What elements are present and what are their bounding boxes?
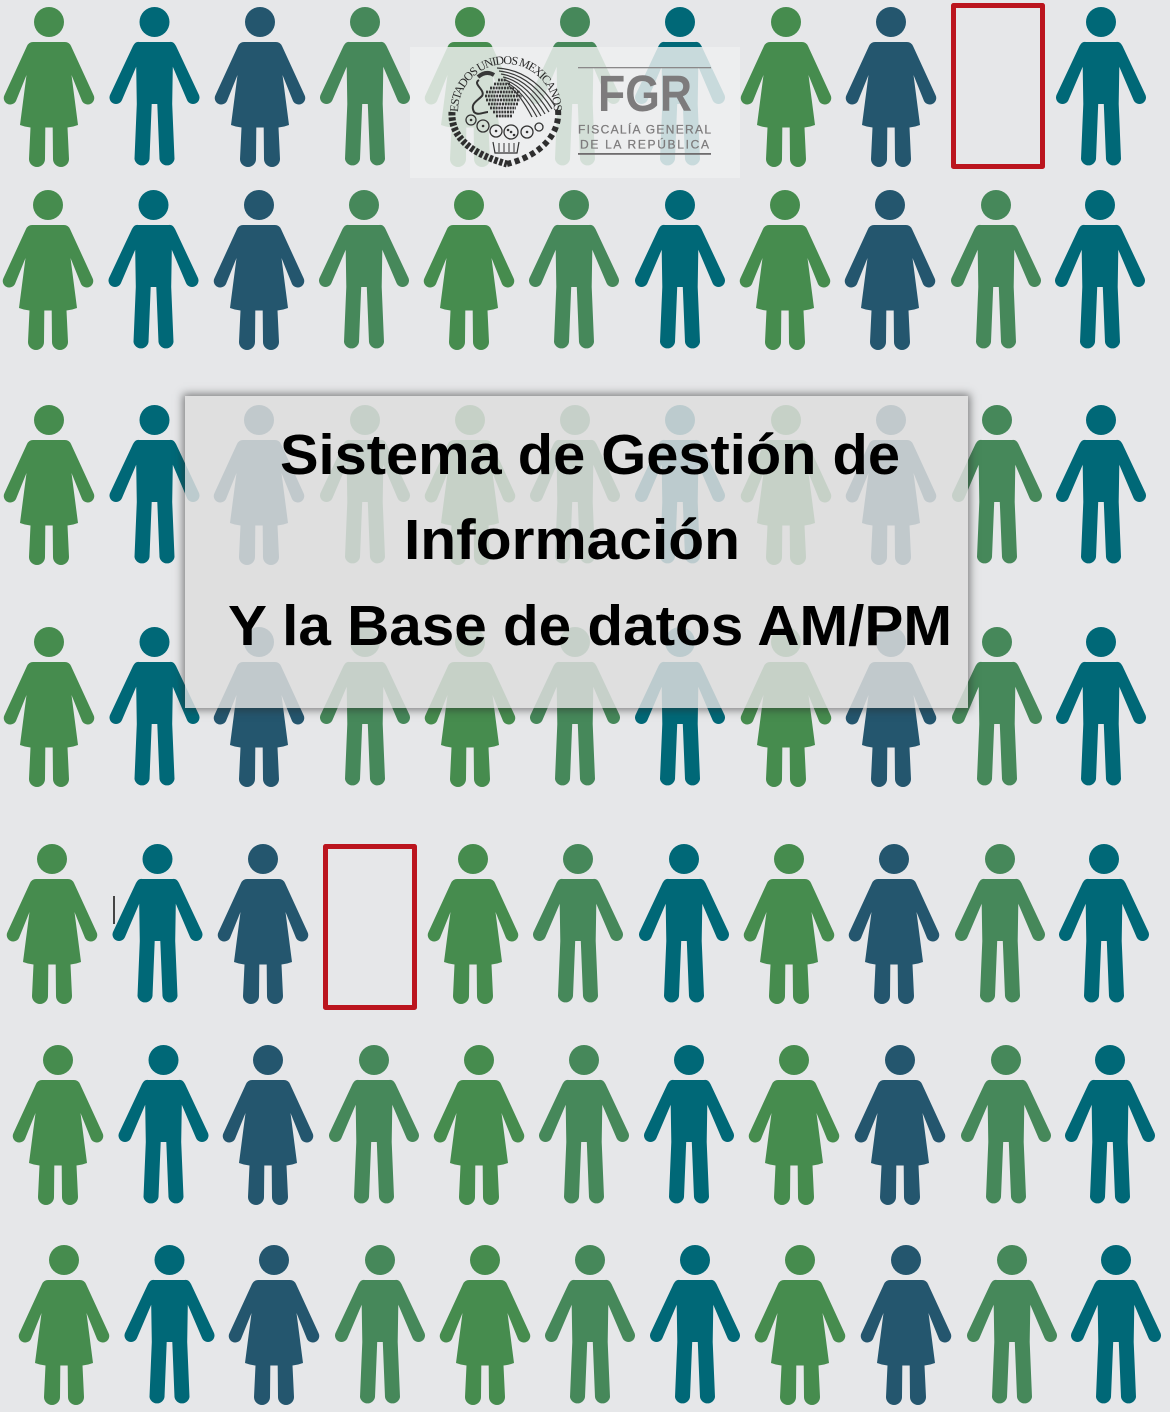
- title line 2: Información: [404, 508, 740, 572]
- title backing panel: [185, 396, 968, 708]
- wordmark: FGR: FGR: [598, 65, 692, 122]
- title line 3: Y la Base de datos AM/PM: [228, 594, 952, 658]
- eagle wing: [497, 68, 555, 117]
- agency name line 1: FISCALÍA GENERAL: [578, 122, 711, 136]
- serpent: [473, 80, 488, 114]
- title line 1: Sistema de Gestión de: [280, 423, 900, 487]
- rule below wordmark: [578, 153, 711, 155]
- title: [228, 423, 952, 658]
- row 6 of people: [13, 1045, 1155, 1205]
- pedestal: [493, 142, 519, 153]
- row 2 of people: [3, 190, 1145, 350]
- red empty frame, row 5: [326, 846, 414, 1008]
- oak branch: [452, 112, 507, 164]
- row 3 of people: [4, 405, 1146, 565]
- logo: FGR emblem and wordmark: [448, 56, 711, 168]
- row 5 of people: [7, 844, 1149, 1004]
- nopal cactus pads: [466, 115, 543, 139]
- row 4 of people: [4, 627, 1146, 787]
- text cursor mark: [113, 896, 115, 924]
- agency name line 2: DE LA REPÚBLICA: [580, 136, 709, 152]
- laurel branch: [507, 110, 558, 164]
- emblem: national coat of arms: [448, 56, 562, 168]
- row 1 of people: [4, 7, 1146, 167]
- row 7 of people: [19, 1245, 1161, 1405]
- logo backing panel: [410, 47, 740, 178]
- red empty frame, row 1: [954, 6, 1042, 166]
- rule above FGR: [578, 67, 711, 68]
- emblem lettering: ESTADOS UNIDOS MEXICANOS: [450, 56, 562, 112]
- eagle body: [478, 73, 522, 116]
